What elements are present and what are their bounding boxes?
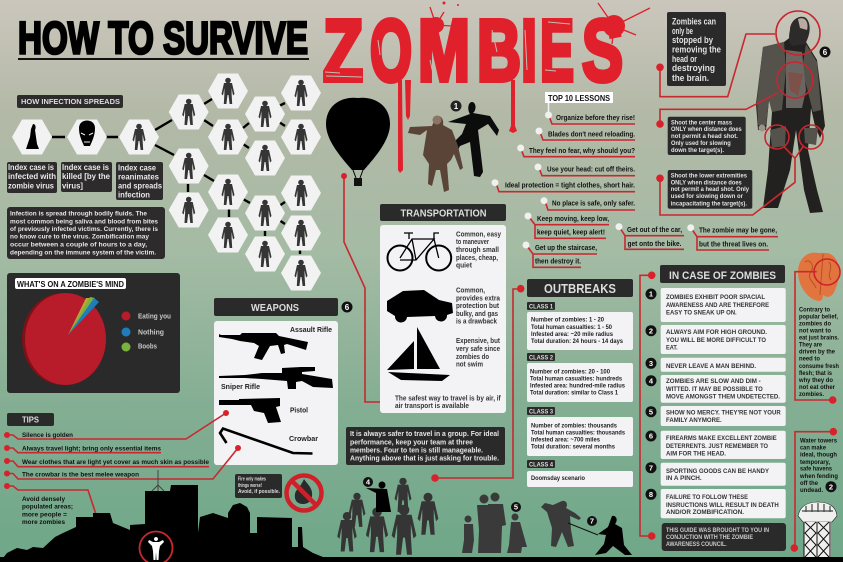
- class 1: CLASS 1: [529, 304, 553, 311]
- icon: bicycle: [388, 233, 451, 270]
- icon: survivor in circle: [140, 532, 172, 562]
- icon: skull: [79, 120, 95, 146]
- rule badges: 6: [649, 432, 653, 441]
- text: travel in a group: Anything above that is just asking for trouble.: [350, 454, 499, 463]
- legend: [122, 312, 171, 352]
- heading: tips: [7, 413, 54, 426]
- heading: [380, 204, 506, 221]
- callout: head shot: head or: [672, 54, 697, 64]
- class 3: Total duration: several months: [531, 445, 616, 451]
- illustration: zombie horde: 4: [366, 478, 371, 487]
- rule badges: 8: [649, 490, 653, 499]
- text: index case captions: infection: [118, 190, 150, 200]
- rule text: ZOMBIES ARE SLOW AND DIM -: [666, 378, 761, 385]
- lesson text: No place is safe, only safer.: [552, 199, 635, 208]
- heading: WHAT'S ON A ZOMBIE'S MIND: [17, 280, 124, 289]
- description text: Common,: [456, 288, 485, 294]
- lesson text: [505, 113, 777, 266]
- callout: head shot: stopped by: [672, 35, 714, 45]
- class 3: Infested area: ~700 miles: [531, 438, 601, 444]
- lesson text: keep quiet, keep alert!: [537, 228, 605, 236]
- connector: balloon to air travel: [341, 173, 392, 405]
- panel: weapons: WEAPONS: [251, 302, 299, 314]
- callout: center mass: ONLY when distance does: [671, 126, 742, 133]
- text: infection paragraph: no know cure to the virus. Zombification may: [10, 234, 149, 241]
- illustration: family: [462, 492, 527, 553]
- rule text: FIREARMS MAKE EXCELLENT ZOMBIE: [666, 435, 777, 442]
- badge: 6 anatomy: [820, 46, 830, 58]
- callout: water tower: ideal, though: [800, 452, 837, 458]
- callout: lower extremities: incapacitating the target(s).: [671, 200, 747, 208]
- text: travel in a group: performance, keep your team at three: [350, 437, 474, 446]
- callout: brain: consume fresh: [799, 363, 839, 370]
- text: index case captions: zombie virus: [8, 180, 54, 190]
- description text: air transport is available: [395, 403, 469, 410]
- description text: through small: [456, 247, 499, 254]
- callout: head shot: only be: [672, 26, 693, 36]
- labels: Pistol: [290, 406, 308, 414]
- description text: provides extra: [456, 296, 500, 302]
- callout: brain: not eat other: [799, 384, 836, 391]
- class 2: Total duration: similar to Class 1: [530, 391, 619, 397]
- class 1: [527, 302, 633, 350]
- class 1: Number of zombies: 1 - 20: [531, 318, 605, 324]
- badge: 6 anatomy: 6: [823, 48, 828, 57]
- panel: transportation: [380, 204, 506, 413]
- title: zombies: M: [418, 2, 470, 100]
- rule text: AWARENESS AND ARE THEREFORE: [666, 302, 769, 309]
- legend: Boobs: [138, 342, 157, 350]
- callout: water tower: can make: [800, 444, 826, 452]
- heading: [660, 265, 785, 283]
- lesson text: Get up the staircase,: [535, 243, 597, 252]
- callout: fire warning: Avoid, if possible.: [238, 489, 280, 495]
- rule text: EASY TO SNEAK UP ON.: [666, 310, 737, 316]
- arrows: [52, 99, 300, 254]
- callout: fire warning: Fire only makes: [238, 476, 266, 482]
- lesson text: Keep moving, keep low,: [537, 214, 609, 223]
- credit box: THIS GUIDE WAS BROUGHT TO YOU IN: [666, 527, 769, 534]
- icon: index case figure: [26, 124, 39, 149]
- title: zombies: I: [521, 2, 537, 100]
- text: tips list with connectors: Wear clothes that are light yet cover as much skin as possible: [22, 459, 209, 466]
- icon: sniper rifle: [219, 367, 333, 389]
- rule text: FAILURE TO FOLLOW THESE: [666, 494, 748, 501]
- illustration: ninja versus zombie: [541, 501, 632, 555]
- class 1: Total human casualties: 1 - 50: [531, 325, 613, 331]
- rule badges: 1: [649, 290, 653, 299]
- text: index case captions: Index case is: [62, 162, 109, 172]
- text: tips list with connectors: more people =: [22, 512, 67, 518]
- text: index case captions: and spreads: [118, 180, 162, 190]
- text: index case captions: virus]: [62, 180, 83, 190]
- illustration: ninja versus zombie: 7: [590, 517, 594, 526]
- text: tips list with connectors: The crowbar is the best melee weapon: [22, 472, 139, 478]
- text: infection paragraph: depending on the immune system of the victim.: [10, 250, 156, 256]
- title: zombies: E: [540, 2, 574, 100]
- rule text: IN A PINCH.: [666, 475, 702, 482]
- illustration: zombie attacking silhouette: 1: [454, 102, 459, 111]
- callout: brain: [795, 253, 840, 404]
- text: travel in a group: It is always safer to travel in a group. For ideal: [350, 429, 499, 438]
- callout: brain: zombies.: [799, 391, 824, 398]
- icon: sailboat: [387, 327, 450, 381]
- heading: TOP 10 LESSONS: [548, 94, 611, 103]
- labels: [221, 325, 332, 443]
- rule text: EAT.: [666, 344, 678, 352]
- description text: is a drawback: [456, 318, 497, 326]
- rule text: AND/OR ZOMBIFICATION.: [666, 509, 744, 516]
- heading: IN CASE OF ZOMBIES: [669, 270, 776, 282]
- text: infection paragraph: occur between a couple of hours to a day,: [10, 242, 147, 248]
- callout: brain: flesh; that is: [799, 370, 832, 377]
- text: infection paragraph: of previously infected victims. Currently, there is: [10, 226, 158, 233]
- description text: protection but: [456, 303, 500, 310]
- callout: head shot: [656, 12, 775, 97]
- rule text: FAMILY ANYMORE.: [666, 417, 722, 424]
- icon: no fire sign: [286, 476, 322, 510]
- rule text: AIM FOR THE HEAD.: [666, 450, 726, 458]
- labels: Crowbar: [289, 434, 318, 443]
- callout: brain: need to: [799, 356, 820, 362]
- anatomy target circles: [765, 11, 823, 149]
- rule badges: 3: [649, 359, 653, 368]
- callout: water tower: [790, 428, 838, 557]
- text: travel in a group: [346, 427, 505, 465]
- title: zombies: [323, 2, 650, 173]
- class 3: CLASS 3: [529, 409, 553, 416]
- badge: 6: [342, 302, 352, 312]
- lesson text: Use your head: cut off theirs.: [547, 165, 635, 174]
- class 3: Total human casualties: thousands: [531, 431, 626, 437]
- lesson text: then destroy it.: [535, 256, 581, 266]
- description text: The safest way to travel is by air, if: [395, 396, 501, 402]
- icon: hot air balloon: [326, 98, 390, 186]
- class 3: [527, 407, 633, 456]
- text: infection paragraph: Infection is spread through bodily fluids. The: [10, 210, 147, 218]
- callout: center mass: Shoot the center mass: [671, 120, 733, 126]
- callout: water tower: temporary,: [800, 459, 830, 466]
- text: infection paragraph: [7, 207, 165, 259]
- class 4: [527, 460, 633, 487]
- lesson text: Blades don't need reloading.: [548, 130, 635, 138]
- rule badges: 5: [649, 407, 653, 416]
- callout: lower extremities: Shoot the lower extremities: [671, 172, 748, 180]
- rule text: NEVER LEAVE A MAN BEHIND.: [666, 363, 756, 370]
- connector: [640, 272, 656, 540]
- heading: [545, 92, 613, 115]
- class 2: [527, 353, 633, 402]
- icon: assault rifle: [219, 333, 308, 360]
- callout: water tower: undead.: [800, 487, 823, 494]
- callout: center mass: Only used for slowing: [671, 140, 731, 147]
- illustration: anatomy zombie: [756, 17, 825, 213]
- title: zombies: Z: [323, 2, 363, 100]
- rule text: ZOMBIES EXHIBIT POOR SPACIAL: [666, 294, 765, 301]
- callout: brain: zombies do: [799, 320, 831, 328]
- class 2: Infested area: hundred-mile radius: [530, 384, 626, 390]
- description text: bulky, and gas: [456, 311, 498, 318]
- rule cards: [661, 288, 786, 518]
- callout: lower extremities: not permit a head shot. Only: [671, 186, 750, 193]
- description text: zombies do: [456, 354, 489, 361]
- description text: to maneuver: [456, 239, 489, 246]
- lesson underlines: [496, 116, 778, 267]
- icon: zombies: [132, 78, 308, 286]
- text: tips list with connectors: Avoid densely: [22, 496, 65, 503]
- text: index case captions: [7, 162, 163, 200]
- credit box: AWARENESS COUNCIL.: [666, 541, 727, 548]
- callout: brain: eat just brains.: [799, 334, 839, 342]
- title: zombies: O: [370, 2, 412, 100]
- text: tips list with connectors: Always travel light; bring only essential items: [22, 446, 161, 452]
- lesson dots: [492, 112, 694, 248]
- callout: brain: They are: [799, 342, 822, 348]
- panel: what's on a zombie's mind: [7, 273, 180, 393]
- class 4: Doomsday scenario: [531, 476, 585, 482]
- rule text: ALWAYS AIM FOR HIGH GROUND.: [666, 329, 767, 336]
- class 1: Infested area: ~20 mile radius: [531, 332, 614, 338]
- rule badges: 4: [649, 376, 654, 385]
- class 2: CLASS 2: [529, 355, 553, 362]
- callout: water tower: when fending: [799, 473, 838, 480]
- callout: lower extremities: [656, 147, 803, 215]
- rule text: MOVE AMONGST THEM UNDETECTED.: [666, 394, 780, 400]
- class 4: CLASS 4: [529, 462, 553, 469]
- text: index case captions: Index case is: [8, 162, 54, 172]
- title: zombies: S: [582, 2, 623, 100]
- legend: Nothing: [138, 328, 164, 336]
- icon: pistol: [219, 398, 281, 423]
- callout: brain: Contrary to: [799, 306, 830, 314]
- labels: Sniper Rifle: [221, 382, 260, 391]
- callout: lower extremities: used for slowing down or: [671, 193, 744, 200]
- class 3: Number of zombies: thousands: [531, 424, 618, 430]
- lesson text: Organize before they rise!: [556, 113, 635, 122]
- lesson text: They feel no fear, why should you?: [529, 146, 635, 155]
- pie chart: [22, 293, 106, 385]
- illustration: zombie horde: [337, 477, 438, 555]
- credit box: [662, 523, 786, 551]
- text: index case captions: reanimates: [118, 172, 159, 182]
- heading: how infection spreads: [17, 95, 123, 108]
- labels: Assault Rifle: [290, 325, 332, 334]
- panel: outbreaks: [431, 279, 633, 487]
- description text: not swim: [456, 362, 483, 368]
- callout: lower extremities: ONLY when distance does: [671, 180, 742, 186]
- callout: fire warning: [235, 474, 282, 498]
- description text: places, cheap,: [456, 255, 498, 262]
- heading: tips: TIPS: [22, 414, 39, 424]
- legend: Eating you: [138, 312, 171, 320]
- description text: [395, 232, 501, 410]
- credit box: CONJUCTION WITH THE ZOMBIE: [666, 534, 753, 541]
- title: how to survive: HOW TO SURVIVE: [18, 12, 308, 64]
- icon: water tower: [798, 502, 837, 557]
- callout: brain: driven by the: [799, 348, 835, 356]
- lesson text: but the threat lives on.: [699, 240, 768, 248]
- class 2: Number of zombies: 20 - 100: [530, 369, 611, 375]
- callout: water tower: off the: [800, 480, 818, 487]
- callout: center mass: not permit a head shot.: [671, 133, 738, 140]
- callout: brain: why they do: [798, 377, 833, 384]
- callout: center mass: down the target(s).: [671, 147, 724, 154]
- heading: TRANSPORTATION: [400, 208, 486, 220]
- chart: infection tree: [12, 74, 321, 290]
- panel: top 10 lessons: [492, 92, 778, 267]
- callout: head shot: destroying: [672, 63, 715, 73]
- rule text: SPORTING GOODS CAN BE HANDY: [666, 468, 769, 475]
- heading: OUTBREAKS: [544, 282, 616, 296]
- skyline silhouette: [0, 470, 843, 562]
- heading: how infection spreads: HOW INFECTION SPREADS: [21, 97, 120, 106]
- rule badges: 7: [649, 463, 653, 472]
- rule text: SHOW NO MERCY. THEY'RE NOT YOUR: [666, 410, 781, 416]
- title: zombies: B: [477, 2, 521, 100]
- lesson text: Ideal protection = tight clothes, short hair.: [505, 181, 635, 190]
- rule text: [666, 294, 781, 516]
- illustration: family: 5: [514, 503, 518, 512]
- text: tips list with connectors: [4, 410, 241, 548]
- class 1: Total duration: 24 hours - 14 days: [531, 339, 624, 345]
- callout: head shot: Zombies can: [672, 16, 716, 26]
- lesson text: The zombie may be gone,: [699, 226, 777, 235]
- text: tips list with connectors: Silence is golden: [22, 432, 73, 439]
- rule text: WITTED. IT MAY BE POSSIBLE TO: [666, 386, 763, 393]
- rule badges: 2: [649, 326, 653, 335]
- class 2: Total human casualties: hundreds: [530, 377, 623, 383]
- rule text: YOU WILL BE MORE DIFFICULT TO: [666, 337, 766, 344]
- callout: water tower: safe havens: [800, 466, 832, 472]
- callout: head shot: removing the: [672, 44, 721, 54]
- panel: in case of zombies: [640, 265, 786, 551]
- text: index case captions: Index case: [118, 162, 156, 172]
- panel: weapons: [214, 298, 338, 465]
- callout: brain: not want to: [799, 328, 831, 334]
- lesson text: Get out of the car,: [627, 225, 682, 234]
- badge: 6: 6: [345, 303, 350, 312]
- description text: Common, easy: [456, 232, 501, 238]
- lesson text: get onto the bike.: [628, 239, 682, 248]
- callout: water tower: Water towers: [800, 438, 837, 444]
- icon: crowbar: [220, 428, 312, 454]
- callout: center mass: [656, 93, 778, 155]
- callout: head shot: the brain.: [672, 73, 709, 83]
- text: travel in a group: members. Four to ten is still manageable.: [350, 446, 483, 455]
- icon: car: [387, 290, 453, 323]
- rule text: INSRUCTIONS WILL RESULT IN DEATH: [666, 502, 779, 509]
- text: index case captions: infected with: [8, 171, 56, 181]
- text: infection paragraph: most common being saliva and blood from bites: [10, 218, 158, 225]
- hexagons: [12, 74, 321, 290]
- callout: brain: popular belief,: [799, 314, 838, 320]
- description text: Expensive, but: [456, 338, 501, 345]
- text: tips list with connectors: more zombies: [22, 519, 65, 526]
- description text: very safe since: [456, 346, 500, 353]
- callout: water tower: 2: [829, 482, 833, 492]
- illustration: zombie attacking silhouette: [408, 100, 499, 192]
- heading: [527, 279, 633, 297]
- connector: [431, 285, 524, 482]
- text: tips list with connectors: populated areas;: [22, 504, 73, 511]
- icon: brain: [798, 253, 840, 301]
- callout: fire warning: things worse!: [238, 483, 262, 489]
- rule badges: [646, 288, 656, 500]
- description text: quiet: [456, 262, 473, 270]
- rule text: DETERRENTS. JUST REMEMBER TO: [666, 443, 768, 450]
- text: index case captions: killed [by the: [62, 171, 110, 181]
